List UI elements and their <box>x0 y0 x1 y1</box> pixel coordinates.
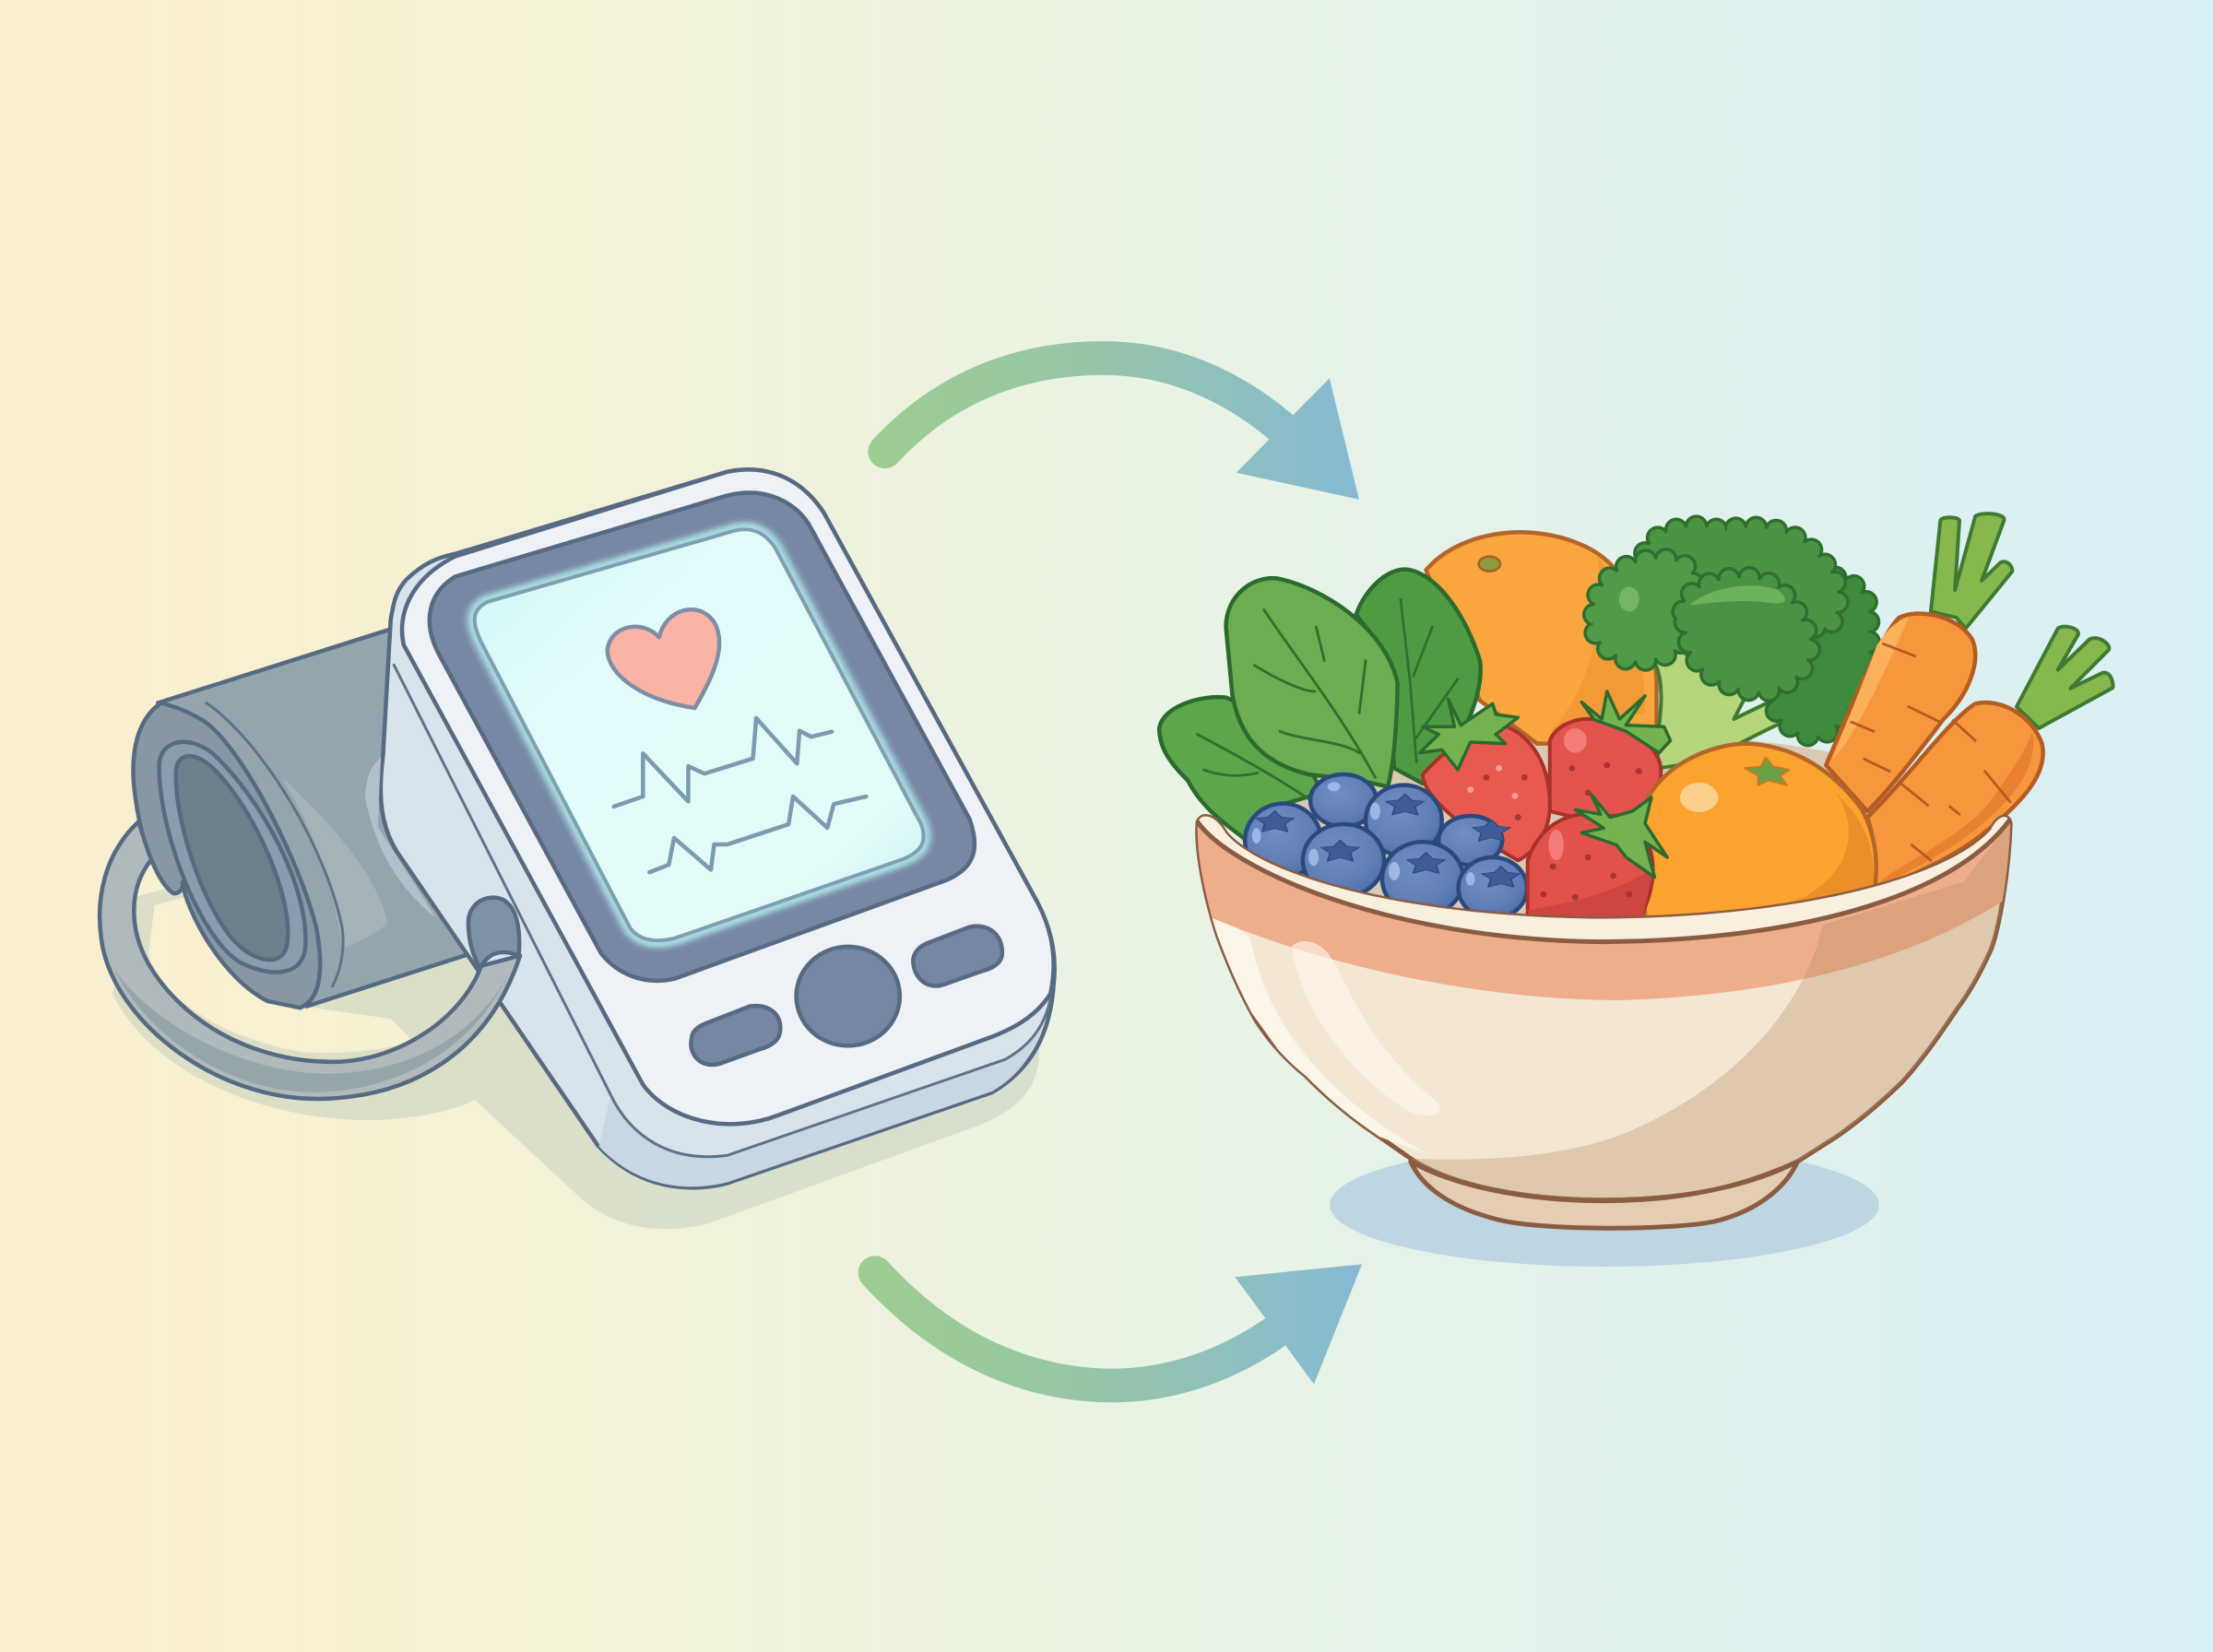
screen <box>475 529 924 940</box>
icon: heart <box>608 609 719 708</box>
arrow: bottom curved arrow <box>875 1264 1362 1386</box>
bowl rim <box>1189 811 2013 942</box>
blueberry <box>1438 816 1510 865</box>
back orange <box>1426 532 1657 744</box>
blueberries <box>1245 774 1527 919</box>
bowl shading <box>1405 811 2018 1210</box>
blueberry <box>1245 804 1321 878</box>
spinach leaf large <box>1226 578 1397 786</box>
bowl foot <box>1411 1162 1797 1228</box>
blood pressure monitor <box>100 469 1055 1229</box>
broccoli floret left <box>1593 560 1693 661</box>
bowl body <box>1198 817 2010 1200</box>
bowl foot line <box>1411 1162 1797 1201</box>
broccoli floret top <box>1645 526 1838 627</box>
blueberry <box>1366 785 1442 856</box>
air tube ring <box>100 821 520 1099</box>
monitor lower band <box>599 998 1050 1186</box>
pulse line upper <box>614 718 832 807</box>
broccoli floret front <box>1683 578 1810 691</box>
screen bezel <box>430 492 975 981</box>
bowl <box>1189 811 2018 1228</box>
blueberry <box>1382 842 1463 915</box>
tube connector <box>468 898 519 968</box>
spinach leaf lower <box>1159 697 1321 839</box>
strawberry back right <box>1550 691 1671 818</box>
screen glow <box>475 529 924 940</box>
bowl shadow <box>1330 1143 1879 1267</box>
food in the bowl <box>1159 513 2113 920</box>
strawberry back left <box>1420 699 1550 860</box>
bowl left light band <box>1201 903 1427 1154</box>
cuff body <box>158 630 488 1007</box>
spinach leaf back <box>1356 570 1481 784</box>
cuff roll opening <box>134 702 320 1008</box>
front orange <box>1642 744 1876 920</box>
monitor body <box>365 469 1055 1187</box>
carrot front <box>1867 627 2113 890</box>
monitor lower edge lines <box>394 665 1050 1157</box>
button left <box>691 1006 780 1065</box>
pulse line lower <box>649 796 866 872</box>
strawberry front <box>1528 795 1667 920</box>
monitor ground shadow <box>112 888 1039 1229</box>
button right <box>913 926 1002 986</box>
bowl rim line <box>1198 820 2009 942</box>
button centre <box>797 947 900 1045</box>
broccoli stalk <box>1651 652 1785 768</box>
arrow: top curved arrow <box>885 359 1359 500</box>
carrot back <box>1826 513 2012 811</box>
bowl back interior <box>1236 733 1973 917</box>
monitor front face <box>402 469 1054 1124</box>
blueberry <box>1303 824 1384 897</box>
blueberry <box>1459 857 1527 919</box>
bowl stripe <box>1189 811 2013 1000</box>
broccoli <box>1593 526 1869 768</box>
broccoli floret right <box>1773 578 1869 736</box>
blueberry <box>1310 774 1377 827</box>
bowl highlight <box>1292 941 1439 1115</box>
